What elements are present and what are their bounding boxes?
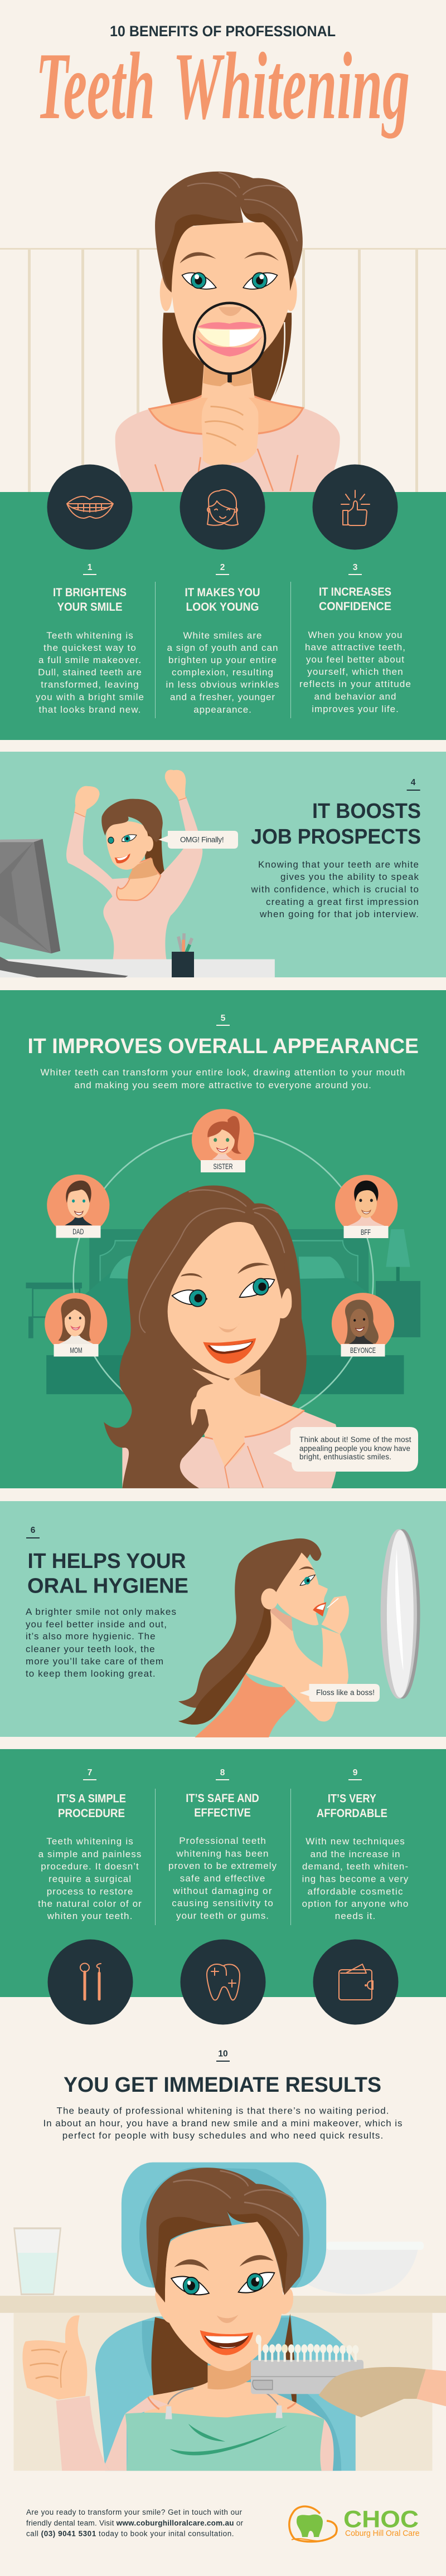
speech bubble: floss like a boss: Floss like a boss! xyxy=(316,1688,375,1697)
panel: job prospects xyxy=(0,752,446,977)
illustration: dental chair scene with smiling patient xyxy=(0,2163,446,2471)
body text: benefit 9: demand, teeth whiten- xyxy=(302,1861,408,1872)
hero wall panelling xyxy=(0,248,446,492)
icon circle: thumbs up xyxy=(312,465,398,549)
body text: benefit 5 xyxy=(40,1067,405,1090)
speech bubble: think about it: bright, enthusiastic smiles. xyxy=(299,1453,391,1461)
panel: oral hygiene xyxy=(0,1501,446,1737)
body text: benefit 10 xyxy=(43,2105,403,2141)
benefit number 5: 5 xyxy=(221,1014,226,1023)
body text: benefit 3: improves your life. xyxy=(312,704,399,714)
body text: benefit 6: A brighter smile not only makes xyxy=(26,1606,176,1617)
body text: benefit 1: Dull, stained teeth are xyxy=(38,667,142,678)
body text: benefit 2 xyxy=(166,630,279,715)
body text: benefit 7: whiten your teeth. xyxy=(47,1911,132,1921)
heading: it's a simple procedure xyxy=(57,1792,126,1820)
body text: benefit 1: you with a bright smile xyxy=(36,692,144,702)
body text: benefit 8: Professional teeth xyxy=(179,1835,266,1846)
body text: benefit 8: proven to be extremely xyxy=(168,1861,277,1871)
heading: it's safe and effective: IT’S SAFE AND xyxy=(186,1792,259,1805)
illustration: desk, monitor and cheering woman xyxy=(0,770,275,977)
avatar: mom: MOM xyxy=(70,1346,83,1355)
heading: it increases confidence: IT INCREASES xyxy=(319,586,391,598)
body text: benefit 2: appearance. xyxy=(193,704,251,715)
call to action text xyxy=(26,2508,243,2538)
panel: overall appearance xyxy=(0,990,446,1488)
body text: benefit 9: option for anyone who xyxy=(302,1898,408,1909)
avatar: beyonce xyxy=(332,1293,394,1356)
icon circle: young face xyxy=(180,465,265,549)
heading: it's very affordable: AFFORDABLE xyxy=(317,1807,387,1820)
body text: benefit 7: procedure. It doesn’t xyxy=(41,1861,139,1872)
benefit number 1 xyxy=(83,563,96,575)
body text: benefit 3: When you know you xyxy=(308,630,403,640)
speech bubble: OMG! Finally! xyxy=(158,831,238,849)
illustration: thinking woman xyxy=(104,1185,338,1488)
benefit number 9: 9 xyxy=(353,1768,358,1778)
heading: it's safe and effective: EFFECTIVE xyxy=(194,1806,251,1819)
body text: benefit 7: a simple and painless xyxy=(38,1849,141,1859)
green band: benefits 1-3 xyxy=(0,492,446,740)
body text: benefit 10: perfect for people with busy schedules and who need quick results. xyxy=(62,2130,383,2141)
benefit number 3 xyxy=(348,563,362,575)
heading: it brightens your smile: IT BRIGHTENS xyxy=(53,586,127,599)
speech bubble: think about it xyxy=(273,1427,418,1472)
body text: benefit 3: and behavior and xyxy=(314,691,396,702)
speech bubble: floss like a boss xyxy=(300,1684,380,1702)
body text: benefit 9: needs it. xyxy=(335,1911,375,1921)
title: Teeth xyxy=(36,33,155,139)
benefit number 4 xyxy=(407,778,420,791)
avatar: dad xyxy=(47,1175,109,1238)
pen cup xyxy=(172,952,194,977)
avatar: sister: SISTER xyxy=(213,1162,233,1171)
heading: it makes you look young: IT MAKES YOU xyxy=(185,586,260,599)
icon circle: wallet xyxy=(313,1939,398,2025)
benefit number 8 xyxy=(216,1768,229,1780)
heading: it's a simple procedure: IT’S A SIMPLE xyxy=(57,1792,126,1805)
speech bubble: think about it: Think about it! Some of the most xyxy=(299,1435,411,1444)
benefit number 9 xyxy=(348,1768,362,1780)
body text: benefit 8: causing sensitivity to xyxy=(172,1898,273,1908)
heading: it's very affordable: IT’S VERY xyxy=(328,1792,376,1805)
body text: benefit 1: the quickest way to xyxy=(43,642,136,653)
logo: Coburg Hill Oral Care xyxy=(289,2506,419,2541)
body text: benefit 8 xyxy=(168,1835,277,1921)
heading: it increases confidence: CONFIDENCE xyxy=(319,600,391,613)
heading: it helps your oral hygiene: ORAL HYGIENE xyxy=(27,1575,188,1598)
icon circle: dental tools xyxy=(48,1939,133,2025)
body text: benefit 1: Teeth whitening is xyxy=(46,630,133,641)
call to action text: call (03) 9041 5301 today to book your inital consultation. xyxy=(26,2530,234,2538)
speech bubble: OMG! Finally!: OMG! Finally! xyxy=(180,836,224,844)
heading: you get immediate results: YOU GET IMMEDIATE RESULTS xyxy=(64,2073,381,2097)
benefit number 5 xyxy=(216,1014,230,1026)
body text: benefit 1: a full smile makeover. xyxy=(38,655,141,665)
body text: benefit 8: whitening has been xyxy=(176,1848,269,1859)
green band: benefits 7-9 xyxy=(0,1749,446,1997)
body text: benefit 6: it’s also more hygienic. The xyxy=(26,1631,156,1642)
benefit number 2 xyxy=(216,563,229,575)
heading: it's safe and effective xyxy=(186,1792,259,1819)
illustration: mirror xyxy=(381,1529,420,1699)
connecting ring xyxy=(74,1130,373,1429)
speech bubble: think about it: appealing people you know have xyxy=(299,1444,410,1453)
body text: benefit 6: more you’ll take care of them xyxy=(26,1656,163,1667)
body text: benefit 5: Whiter teeth can transform your entire look, drawing attention to your mouth xyxy=(40,1067,405,1078)
icon circle: smile xyxy=(47,465,133,549)
benefit number 3: 3 xyxy=(353,563,358,572)
subtitle: 10 BENEFITS OF PROFESSIONAL xyxy=(110,23,336,40)
body text: benefit 3 xyxy=(299,630,411,714)
body text: benefit 1 xyxy=(36,630,144,715)
avatar: mom xyxy=(45,1293,107,1356)
heading: it improves overall appearance: IT IMPROVES OVERALL APPEARANCE xyxy=(28,1035,419,1058)
benefit number 4: 4 xyxy=(411,778,416,787)
body text: benefit 4: when going for that job interview. xyxy=(259,909,419,919)
body text: benefit 3: have attractive teeth, xyxy=(305,642,405,652)
heading: it boosts job prospects: JOB PROSPECTS xyxy=(251,825,421,849)
body text: benefit 2: brighten up your entire xyxy=(168,655,277,665)
heading: it increases confidence xyxy=(319,586,391,613)
heading: it helps your oral hygiene: IT HELPS YOUR xyxy=(28,1550,186,1573)
body text: benefit 2: in less obvious wrinkles xyxy=(166,679,279,690)
body text: benefit 9: ing has become a very xyxy=(302,1873,409,1884)
body text: benefit 6: you feel better inside and out, xyxy=(26,1619,167,1629)
body text: benefit 4: Knowing that your teeth are white xyxy=(258,859,419,870)
body text: benefit 9: With new techniques xyxy=(306,1836,405,1847)
body text: benefit 9: and the increase in xyxy=(310,1849,400,1859)
body text: benefit 7: process to restore xyxy=(47,1886,133,1897)
body text: benefit 10: The beauty of professional whitening is that there’s no waiting period. xyxy=(57,2105,389,2116)
benefit number 6 xyxy=(26,1526,40,1538)
body text: benefit 10: In about an hour, you have a brand new smile and a mini makeover, which is xyxy=(43,2118,403,2129)
heading: it's a simple procedure: PROCEDURE xyxy=(58,1807,125,1820)
body text: benefit 3: reflects in your attitude xyxy=(299,679,411,689)
benefit number 2: 2 xyxy=(220,563,225,572)
body text: benefit 7 xyxy=(38,1836,142,1921)
avatar: bff xyxy=(335,1175,397,1238)
body text: benefit 8: your teeth or gums. xyxy=(176,1910,269,1921)
body text: benefit 7: the natural color of or xyxy=(38,1898,142,1909)
heading: it brightens your smile: YOUR SMILE xyxy=(57,601,123,613)
body text: benefit 4: creating a great first impression xyxy=(266,897,419,907)
avatar: bff: BFF xyxy=(361,1228,371,1236)
benefit number 7 xyxy=(83,1768,96,1780)
body text: benefit 3: you feel better about xyxy=(306,654,404,665)
benefit number 10 xyxy=(216,2049,230,2062)
illustration: woman flossing xyxy=(178,1538,349,1737)
body text: benefit 6 xyxy=(26,1606,176,1679)
benefit number 6: 6 xyxy=(31,1526,36,1535)
body text: benefit 4 xyxy=(251,859,419,919)
body text: benefit 2: complexion, resulting xyxy=(172,667,273,678)
hero woman with magnifying glass xyxy=(115,172,340,494)
body text: benefit 1: that looks brand new. xyxy=(39,704,140,715)
heading: it boosts job prospects xyxy=(251,800,421,849)
body text: benefit 8: safe and effective xyxy=(180,1873,265,1883)
body text: benefit 7: Teeth whitening is xyxy=(46,1836,133,1847)
body text: benefit 6: cleaner your teeth look, the xyxy=(26,1644,155,1654)
benefit number 10: 10 xyxy=(218,2049,228,2058)
body text: benefit 2: White smiles are xyxy=(183,630,262,641)
heading: it's very affordable xyxy=(317,1792,387,1820)
call to action text: Are you ready to transform your smile? Get in touch with our xyxy=(26,2508,242,2516)
body text: benefit 4: gives you the ability to speak xyxy=(280,871,419,882)
illustration: bedroom background xyxy=(26,1229,420,1394)
avatar: beyonce: BEYONCE xyxy=(350,1346,376,1355)
benefit number 8: 8 xyxy=(220,1768,225,1778)
body text: benefit 8: without damaging or xyxy=(173,1886,272,1896)
body text: benefit 1: transformed, leaving xyxy=(41,679,139,690)
title xyxy=(36,33,410,139)
body text: benefit 3: yourself, which then xyxy=(307,666,403,677)
heading: it makes you look young: LOOK YOUNG xyxy=(186,601,259,613)
body text: benefit 2: a sign of youth and can xyxy=(167,642,278,653)
body text: benefit 4: with confidence, which is crucial to xyxy=(251,884,419,895)
avatar: dad: DAD xyxy=(72,1227,84,1236)
logo: Coburg Hill Oral Care: Coburg Hill Oral Care xyxy=(345,2529,419,2538)
heading: it makes you look young xyxy=(185,586,260,613)
benefit number 1: 1 xyxy=(88,563,93,572)
body text: benefit 9: affordable cosmetic xyxy=(308,1886,403,1897)
heading: it boosts job prospects: IT BOOSTS xyxy=(312,800,421,823)
body text: benefit 5: and making you seem more attractive to everyone around you. xyxy=(74,1080,371,1090)
avatar: sister xyxy=(192,1109,254,1172)
logo: Coburg Hill Oral Care: CHOC xyxy=(343,2506,419,2533)
icon circle: sparkling tooth xyxy=(181,1939,265,2025)
heading: it brightens your smile xyxy=(53,586,127,613)
call to action text: friendly dental team. Visit www.coburghilloralcare.com.au or xyxy=(26,2519,243,2528)
body text: benefit 2: and a fresher, younger xyxy=(170,692,275,702)
heading: it helps your oral hygiene xyxy=(27,1550,188,1598)
body text: benefit 7: require a surgical xyxy=(49,1873,131,1884)
body text: benefit 9 xyxy=(302,1836,409,1921)
benefit number 7: 7 xyxy=(88,1768,92,1778)
body text: benefit 6: to keep them looking great. xyxy=(26,1668,156,1679)
